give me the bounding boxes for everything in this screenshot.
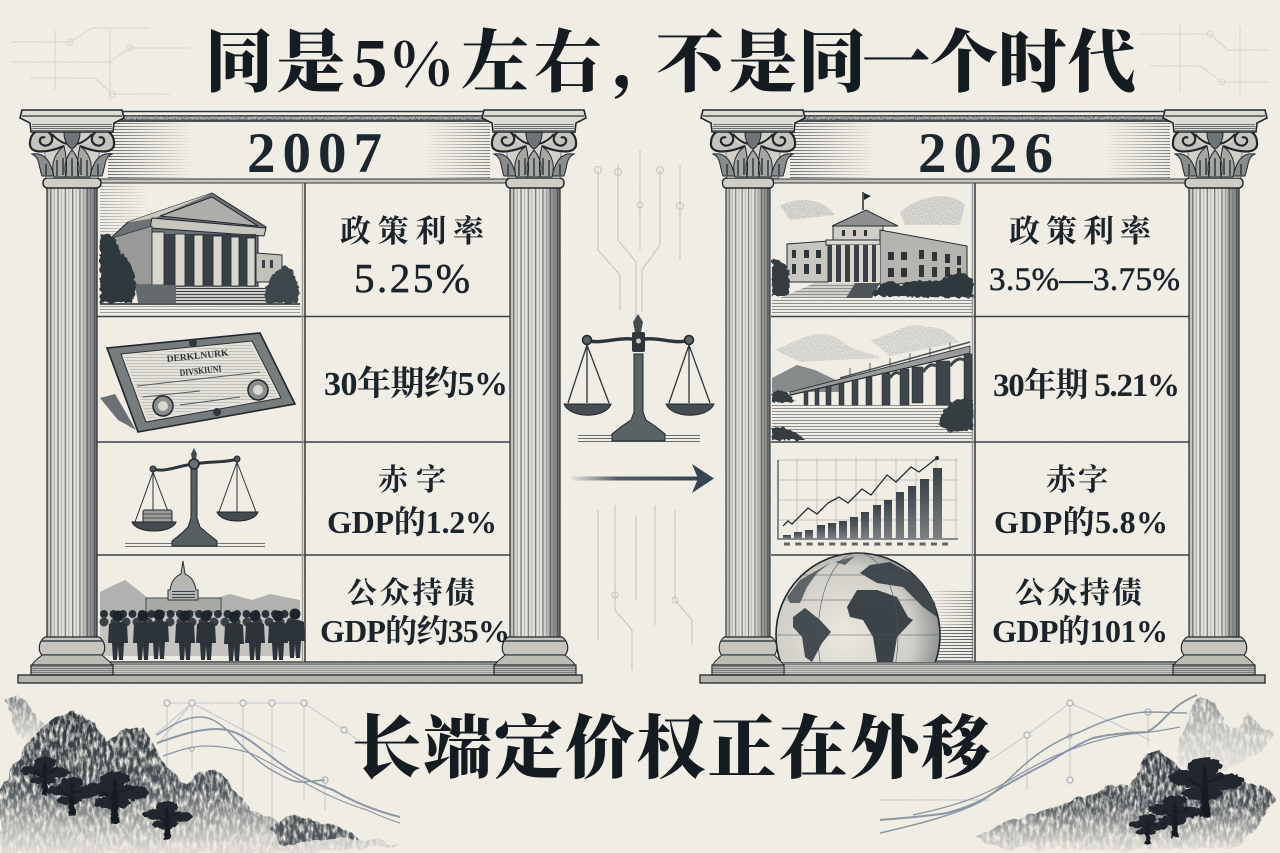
icon: bond certificate: DIVSKIUNI (179, 365, 222, 379)
icon: capitol and crowd (100, 561, 305, 661)
cell text: public debt 2026: 公众持债 (1015, 577, 1143, 610)
entablature: 2007 (97, 112, 517, 183)
panel: 2026 (700, 110, 1267, 717)
table grid: 2007 (97, 183, 519, 662)
entablature: 2026 (770, 112, 1190, 183)
year 2026: 2026 (918, 122, 1060, 185)
title: 同是 (205, 9, 345, 106)
cell text: deficit 2026: GDP的5.8% (994, 504, 1168, 540)
left column: 2007 (20, 110, 124, 675)
icon: government building with flag (772, 192, 973, 314)
icon: central balance scale (564, 314, 714, 444)
cell text: deficit 2007 (327, 464, 497, 540)
title: 5% (351, 18, 451, 104)
trees right (1129, 758, 1244, 844)
icon: bond certificate (100, 333, 295, 432)
icon: classical bank building (100, 186, 300, 314)
icon: bond certificate: DERKLNURK (166, 348, 230, 365)
cell text: 30-year 2007: 30年期约5% (324, 365, 508, 403)
bottom headline: 长端定价权正在外移 (352, 693, 990, 792)
panel: 2007 (18, 110, 586, 683)
icon: balance scale small (125, 448, 265, 547)
cell text: public debt 2026: GDP的101% (992, 613, 1168, 649)
cell text: policy rate 2007: 5.25% (354, 255, 470, 301)
decorative circuit corner: top right (1140, 24, 1270, 96)
cell text: deficit 2007: GDP的1.2% (327, 504, 497, 540)
arrow (572, 464, 714, 493)
icon: bridge over water (772, 325, 973, 440)
icon: globe (775, 552, 973, 662)
cell text: policy rate 2007 (340, 214, 485, 301)
cell text: public debt 2007: 公众持债 (347, 577, 476, 610)
base plinth: 2026 (700, 664, 1265, 683)
cell text: deficit 2026 (994, 464, 1168, 540)
cell text: policy rate 2007: 政策利率 (340, 214, 485, 249)
cell text: policy rate 2026 (989, 214, 1180, 298)
decorative circuit corner: top left (12, 28, 190, 100)
cell text: deficit 2007: 赤字 (378, 464, 446, 497)
year 2007: 2007 (247, 122, 389, 185)
cell text: 30-year 2026: 30年期 5.21% (993, 367, 1180, 404)
left column: 2026 (701, 110, 805, 675)
base plinth: 2007 (18, 664, 582, 683)
cell text: public debt 2026 (992, 577, 1168, 649)
right column: 2026 (1163, 110, 1267, 675)
faint data curves (155, 695, 1197, 833)
mountains right (975, 695, 1275, 850)
mountains left (0, 694, 400, 853)
cell text: deficit 2026: 赤字 (1046, 464, 1108, 497)
right column: 2007 (482, 110, 586, 675)
cell text: public debt 2007: GDP的约35% (320, 613, 510, 649)
trees left (21, 757, 192, 840)
icon: rising bar chart (778, 456, 958, 544)
center connector circuit lines (594, 150, 692, 670)
title: 左右,不是同一个时代 (461, 9, 1137, 106)
cell text: policy rate 2026: 3.5%—3.75% (989, 262, 1180, 298)
cell text: policy rate 2026: 政策利率 (1009, 214, 1152, 249)
table grid: 2026 (771, 183, 1190, 662)
cell text: public debt 2007 (320, 577, 510, 649)
